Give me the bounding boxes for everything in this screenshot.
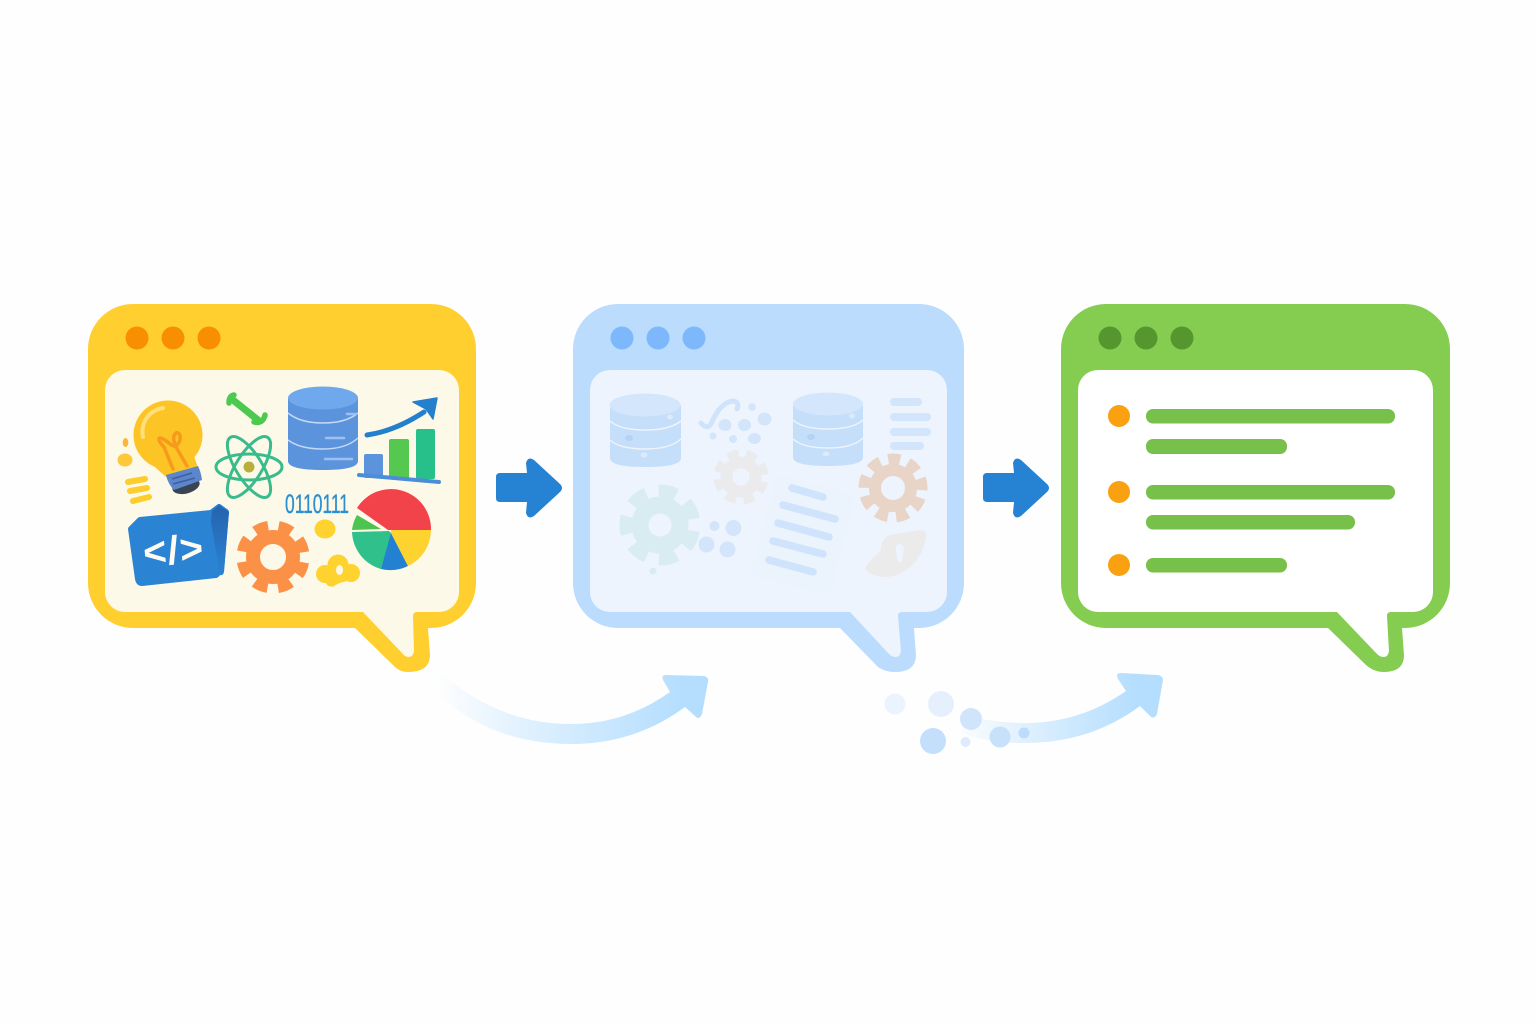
window dots bbox=[1098, 326, 1194, 350]
window dots bbox=[126, 326, 220, 350]
icon: yellow cloud bbox=[316, 554, 360, 587]
icon: code folder bbox=[131, 505, 229, 583]
faded database right bbox=[793, 392, 863, 466]
window content area bbox=[590, 370, 947, 657]
window content area bbox=[1078, 370, 1433, 657]
icon: atom bbox=[216, 430, 282, 504]
particles bbox=[884, 691, 1030, 754]
icon: growth bar chart bbox=[359, 398, 439, 482]
speech bubble window frame bbox=[573, 304, 964, 672]
curved arrow: below first panel bbox=[436, 668, 708, 744]
icon: pie chart bbox=[352, 489, 431, 570]
icon: code folder: </> bbox=[141, 526, 205, 576]
faded grey gear bbox=[713, 449, 769, 505]
panel: filtered information bbox=[573, 304, 964, 672]
icon: orange gear bbox=[237, 521, 309, 593]
binary digits: 0110111 bbox=[285, 489, 349, 519]
icon: yellow sparks bbox=[118, 438, 149, 501]
speech bubble window frame bbox=[1061, 304, 1450, 672]
arrow: second to third panel bbox=[983, 459, 1049, 517]
icon: database bbox=[288, 386, 358, 470]
faded teal gear bbox=[621, 486, 699, 564]
curved arrow with particles: below second panel bbox=[884, 673, 1163, 754]
icon: light bulb bbox=[134, 400, 202, 497]
faded database left bbox=[610, 394, 681, 467]
panel: clear summary list bbox=[1061, 304, 1450, 672]
arrow: first to second panel bbox=[496, 459, 562, 517]
faded leaf shape bbox=[865, 530, 926, 577]
list item 2 bbox=[1108, 481, 1395, 530]
faded text lines bbox=[890, 398, 931, 450]
icon: yellow dot bbox=[314, 520, 336, 538]
list item 3 bbox=[1108, 554, 1287, 576]
faded document bbox=[749, 474, 857, 596]
curved arrow body bbox=[960, 673, 1163, 743]
window dots bbox=[610, 326, 706, 350]
window content area bbox=[105, 370, 459, 657]
speech bubble window frame bbox=[88, 304, 476, 672]
faded scattered dots and squiggle bbox=[701, 401, 772, 444]
list item 1 bbox=[1108, 405, 1395, 454]
faded orange gear bbox=[856, 451, 930, 525]
icon: green connector bbox=[229, 395, 265, 422]
panel: raw mixed information bbox=[88, 304, 476, 672]
faded lower dots bbox=[650, 520, 742, 574]
